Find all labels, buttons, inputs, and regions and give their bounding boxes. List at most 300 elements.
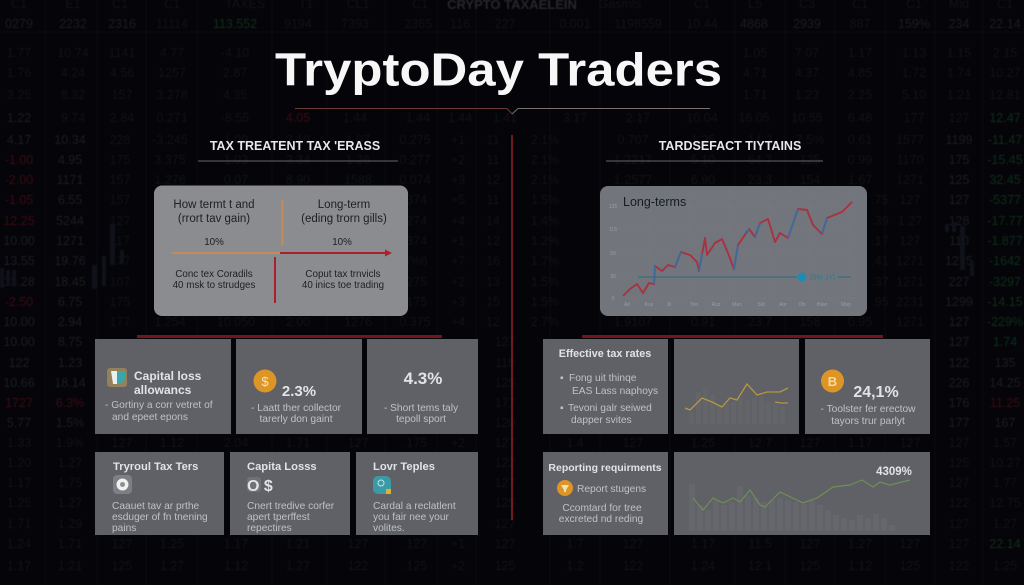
background: market data table: 4.35: [223, 88, 247, 102]
y axis labels: 115: [609, 227, 617, 233]
background: market data table: .39: [871, 214, 889, 228]
x axis labels: Ad: [624, 302, 630, 308]
background: market data table: 19.76: [54, 254, 86, 268]
y axis labels: 30: [610, 274, 616, 280]
background: market data table: -14.15: [987, 295, 1023, 309]
title divider with notch: [295, 108, 710, 114]
card: 2.3% stat: 2.3%: [282, 383, 316, 400]
background: market data table: 127: [112, 436, 132, 450]
background: market data table: 1.27: [898, 214, 922, 228]
background: market data table: +2: [451, 275, 465, 289]
card: green trend chart: 4309%: [876, 466, 912, 478]
background: market data table: 125: [949, 173, 969, 187]
background: market data table: 127: [949, 315, 969, 329]
background: market data table: 1.9%: [56, 436, 84, 450]
background: market data table: 1.77: [993, 476, 1017, 490]
background: market data table: 1.12: [224, 559, 248, 573]
background: market data table: 2.1%: [531, 153, 559, 167]
background: market data table: 12.47: [989, 111, 1021, 125]
background: market data table: +2: [451, 436, 465, 450]
background: market data table: 1.13: [902, 46, 926, 60]
card: 2.3% stat: - Laatt ther collector: [251, 403, 342, 414]
background: market data table: 175: [110, 295, 130, 309]
background: market data table: 127: [900, 537, 920, 551]
card: effective tax rates: ▪: [560, 373, 564, 384]
x axis labels: Yvn: [690, 302, 698, 308]
card: effective tax rates: EAS Lass naphoys: [572, 386, 658, 397]
background: market data table: -8.55: [221, 111, 249, 125]
background: market data table: 176: [949, 396, 969, 410]
long-term note: [302, 269, 384, 291]
background: market data table: 0.275: [399, 133, 431, 147]
background: market data table: +1: [451, 537, 465, 551]
background: market data table: 15: [486, 295, 500, 309]
background: market data table: 110: [949, 234, 969, 248]
background: market data table: 12: [486, 173, 500, 187]
long-term heading: [301, 199, 387, 225]
background: market data table: 1.4: [566, 436, 584, 450]
background: market data table: 14.2: [748, 133, 772, 147]
background: market data table: 127: [110, 214, 130, 228]
background: market data table: 7.07: [795, 46, 819, 60]
card: tax tiers: Caauet tav ar prthe: [112, 501, 200, 512]
background: market data table: 6.48: [848, 111, 872, 125]
background: market data table: 12.1: [748, 559, 772, 573]
x axis labels: [624, 302, 851, 308]
background: market data table: 3.10: [286, 133, 310, 147]
background: market data table: 1.25: [7, 496, 31, 510]
background: market data table: 9194: [284, 17, 312, 31]
background: market data table: 177: [110, 254, 130, 268]
background: market data table: -2.00: [5, 173, 33, 187]
background: market data table: 1.05: [743, 46, 767, 60]
background: market data table: 1.7: [566, 537, 584, 551]
background: market data table: 227: [949, 275, 969, 289]
card: low tiers: Lovr Teples: [373, 461, 435, 473]
background: market data table: 1.03: [224, 153, 248, 167]
background: market data table: 127: [348, 436, 368, 450]
background: market data table: 122: [949, 356, 969, 370]
card: effective tax rates: [543, 339, 668, 434]
background: market data table: -11.47: [988, 133, 1022, 147]
background: market data table: 1.44: [448, 111, 472, 125]
y axis labels: 0: [612, 296, 615, 302]
background: market data table: 1.27: [848, 537, 872, 551]
background: market data table: 2939: [793, 17, 821, 31]
background: market data table: 11: [487, 153, 500, 167]
chart heading: Long-terms: [623, 195, 686, 209]
card: capital loss: [230, 452, 350, 535]
background: market data table: -17.77: [987, 214, 1023, 228]
background: market data table: 10.27: [989, 456, 1021, 470]
background: market data table: 7393: [341, 17, 369, 31]
lower red divider: [274, 257, 276, 303]
background: market data table: 1.9107: [614, 315, 652, 329]
background: market data table: 1588: [344, 173, 372, 187]
background: market data table: 128: [949, 214, 969, 228]
background: market data table: 1.77: [7, 46, 31, 60]
background: market data table: 10.44: [686, 17, 718, 31]
background: market data table: 127: [900, 234, 920, 248]
background: market data table: 1.24: [691, 559, 715, 573]
background: market data table: 12.75: [989, 496, 1021, 510]
background: market data table: 7.5%: [796, 133, 824, 147]
background: market data table: 2365: [404, 17, 432, 31]
background: market data table: 1.17: [224, 537, 248, 551]
background: market data table: 0.277: [399, 153, 431, 167]
background: market data table: 1.27: [58, 496, 82, 510]
background: market data table: 1.2%: [531, 234, 559, 248]
background: market data table: 3%6: [402, 254, 428, 268]
background: market data table: 125: [495, 559, 515, 573]
background: market data table: 127: [949, 335, 969, 349]
short-term heading: How termt t and: [173, 199, 255, 211]
background: market data table: 10.00: [3, 335, 35, 349]
background: market data table: 125: [800, 153, 820, 167]
background: market data table: 1299: [945, 295, 973, 309]
background: market data table: +4: [451, 214, 465, 228]
background: market data table: 1.276: [154, 173, 186, 187]
background: market data table: 227: [495, 17, 515, 31]
center vertical divider: [511, 135, 513, 520]
background: market data table: 23.7: [748, 315, 772, 329]
background: market data table: 2231: [896, 295, 924, 309]
background: market data table: 1.26: [346, 153, 370, 167]
background: market data table: 1.20: [7, 456, 31, 470]
card: capital loss: apert tperffest: [247, 512, 310, 523]
background: market data table: 1.44: [406, 111, 430, 125]
background: market data table: 0.61: [848, 133, 872, 147]
background: market data table: 125: [949, 456, 969, 470]
background: market data table: 1.22: [7, 111, 31, 125]
background: market data table: 1.5%: [531, 275, 559, 289]
icon: dollar coin: $: [261, 374, 269, 389]
card: effective tax rates: ▪: [560, 403, 564, 414]
background: market data table: 6.90: [691, 173, 715, 187]
background: market data table: 1271: [896, 254, 924, 268]
panel: tax treatment comparison: [154, 186, 408, 316]
background: market data table: 1141: [109, 46, 135, 60]
background: market data table: 1.74: [947, 66, 971, 80]
card: 24,1% stat: - Toolster fer erectow: [821, 404, 916, 415]
background: market data table: +3: [451, 173, 465, 187]
background: market data table: 1.27: [58, 456, 82, 470]
background: market data table: 125: [495, 496, 515, 510]
background: market data table: 127: [949, 111, 969, 125]
background: market data table: 1199: [946, 133, 972, 147]
card: capital loss allowances: allowancs: [134, 383, 192, 397]
background: market data table: -4.10: [221, 46, 249, 60]
card: capital loss allowances: and epeet epons: [112, 412, 188, 423]
background: market data table: 13.28: [3, 275, 35, 289]
card: effective tax rates: Effective tax rates: [559, 348, 651, 360]
card: capital loss allowances: Capital loss: [134, 369, 202, 383]
background: market data table: .274: [403, 214, 427, 228]
background: market data table: 1.254: [154, 315, 186, 329]
background: market data table: 2.15: [993, 46, 1017, 60]
background: market data table: +7: [451, 254, 465, 268]
background: market data table: 119: [495, 356, 515, 370]
background: market data table: 122: [348, 559, 368, 573]
card: reporting requirements: Report stugens: [577, 484, 646, 495]
background: market data table: -5377: [989, 193, 1021, 207]
card: tax tiers: pains: [112, 523, 136, 534]
card: 24,1% stat: 24,1%: [853, 384, 899, 401]
background: market data table: 1.5%: [56, 416, 84, 430]
card: effective tax rates: Tevoni galr seiwed: [568, 403, 652, 414]
background: market data table: 11.5: [748, 537, 772, 551]
background: market data table: 127: [900, 436, 920, 450]
short-term heading: (rrort tav gain): [178, 213, 250, 225]
background: market data table: 3.375: [154, 153, 186, 167]
background: market data table: 159%: [898, 17, 930, 31]
long-term note: Coput tax trnvicls: [305, 269, 381, 280]
short-term rate: 10%: [204, 237, 224, 248]
card: orange line chart: [674, 339, 799, 434]
background: market data table: 4.37: [795, 66, 819, 80]
background: market data table: 8.75: [58, 335, 82, 349]
background: market data table: 1.21: [286, 537, 310, 551]
background: market data table: 1.12: [848, 559, 872, 573]
background: market data table: 1271: [896, 315, 924, 329]
background: market data table: -15.45: [987, 153, 1023, 167]
card: 4.3% stat: tepoll sport: [396, 414, 446, 425]
background: market data table: 127: [949, 476, 969, 490]
background: market data table: 122: [949, 496, 969, 510]
background: market data table: 127: [495, 537, 515, 551]
background: market data table: 1171: [57, 173, 83, 187]
background: market data table: 1727: [5, 396, 33, 410]
long-term note: 40 inics toe trading: [302, 280, 384, 291]
heading: right column: TARDSEFACT TIYTAINS: [659, 139, 801, 153]
reference line and label: [638, 272, 851, 282]
card: 24,1% stat: tayors trur parlyt: [831, 416, 905, 427]
background: market data table: 6.75: [58, 295, 82, 309]
background: market data table: 1.75: [58, 476, 82, 490]
background: market data table: 4868: [740, 17, 768, 31]
background: market data table: 2.25: [848, 88, 872, 102]
background: market data table: 1.00: [224, 133, 248, 147]
card: low tiers: volites.: [373, 523, 405, 534]
background: market data table: 1.07: [346, 133, 370, 147]
background: market data table: 18.45: [54, 275, 86, 289]
background: market data table: 1271: [896, 275, 924, 289]
background: market data table: 4.77: [160, 46, 184, 60]
card: 2.3% stat: [236, 339, 362, 434]
background: market data table: 0.271: [156, 111, 188, 125]
x axis labels: Ob: [799, 302, 806, 308]
background: market data table: 2316: [108, 17, 136, 31]
background: market data table: 1.33: [7, 436, 31, 450]
background: market data table: 2.00: [286, 315, 310, 329]
card: 4.3% stat: [367, 339, 478, 434]
background: market data table: 1.72: [902, 66, 926, 80]
background: market data table: 1271: [896, 173, 924, 187]
background: market data table: 5.10: [691, 153, 715, 167]
background: market data table: 113.552: [213, 17, 257, 31]
x axis labels: Map: [841, 302, 851, 308]
background: market data table: 8.90: [286, 173, 310, 187]
background: market data table: 1.7%: [531, 254, 559, 268]
card: reporting requirements: Ccomtard for tree: [562, 503, 642, 514]
background: market data table: 10.74: [57, 46, 89, 60]
background: market data table: 127: [949, 436, 969, 450]
background: market data table: 10.66: [3, 376, 35, 390]
background: market data table: 125: [800, 559, 820, 573]
icon: multicolor tile: [107, 368, 127, 387]
background: market data table: 12: [486, 315, 500, 329]
background: market data table: 10.00: [3, 234, 35, 248]
card: reporting requirements: Reporting requirments: [548, 462, 662, 474]
background: market data table: 0.95: [848, 315, 872, 329]
background: market data table: 5244: [56, 214, 84, 228]
background: market data table: 13.55: [3, 254, 35, 268]
background: market data table: 127: [623, 537, 643, 551]
card: effective tax rates: dapper svites: [571, 415, 632, 426]
background: market data table: 4.17: [7, 133, 31, 147]
background: market data table: -1.00: [5, 153, 33, 167]
card: low tiers: [356, 452, 478, 535]
background: market data table: 1.76: [7, 66, 31, 80]
background: market data table: 2.87: [223, 66, 247, 80]
background: market data table: 1.41: [493, 111, 517, 125]
background: market data table: 157: [110, 173, 130, 187]
background: market data table: .127: [403, 537, 427, 551]
long-term rate: 10%: [332, 237, 352, 248]
background: market data table: 11: [487, 133, 500, 147]
card: capital loss: Cnert tredive corfer: [247, 501, 335, 512]
background: market data table: 1.2577: [614, 173, 652, 187]
arrow axis: [172, 250, 392, 256]
background: market data table: 122: [9, 356, 29, 370]
background: market data table: 127: [495, 517, 515, 531]
background: market data table: 125: [112, 559, 132, 573]
background: market data table: 0.99: [848, 153, 872, 167]
background: market data table: 11114: [156, 17, 188, 31]
card: 24,1% stat: [805, 339, 930, 434]
background: market data table: 3.17: [563, 111, 587, 125]
icon: bitcoin coin: B: [828, 374, 837, 389]
background: market data table: 2.1%: [531, 173, 559, 187]
background: market data table: 177: [495, 396, 515, 410]
background: market data table: 1.17: [7, 476, 31, 490]
background: market data table: -3.245: [152, 133, 188, 147]
background: market data table: 127: [495, 436, 515, 450]
short-term note: Conc tex Coradils: [175, 269, 253, 280]
background: market data table: 1.67: [848, 173, 872, 187]
background: market data table: 32.45: [989, 173, 1021, 187]
background: market data table: 226: [949, 376, 969, 390]
short-term note: 40 msk to strudges: [173, 280, 255, 291]
short-term heading: [173, 199, 255, 225]
background: market data table: 1.12: [160, 436, 184, 450]
background: market data table: 14.25: [989, 376, 1021, 390]
background: market data table: -1.877: [987, 234, 1023, 248]
card: tax tiers: Tryroul Tax Ters: [113, 461, 198, 473]
background: market data table: 167: [995, 416, 1015, 430]
background: market data table: 5.77: [7, 416, 31, 430]
background: market data table: 1.5%: [531, 295, 559, 309]
background: market data table: 1.25: [691, 133, 715, 147]
background: market data table: 1271: [56, 234, 84, 248]
background: market data table: 2.17: [626, 111, 650, 125]
x axis labels: Kuy: [645, 302, 654, 308]
background: market data table: 8.32: [61, 88, 85, 102]
background: market data table: 1.44: [343, 111, 367, 125]
background: market data table: 10.00: [3, 315, 35, 329]
background: market data table: -3297: [989, 275, 1021, 289]
background: market data table: .175: [403, 436, 427, 450]
background: market data table: 234: [949, 17, 969, 31]
card: tax tiers: esduger of fn tnening: [112, 512, 208, 523]
icon: report badge: [557, 480, 573, 496]
background: market data table: 1275: [945, 254, 973, 268]
background: market data table: 177: [904, 111, 924, 125]
card: low tiers: Cardal a reclatlent: [373, 501, 456, 512]
background: market data table: 1.17: [7, 559, 31, 573]
background: market data table: 127: [949, 517, 969, 531]
background: market data table: -2.50: [5, 295, 33, 309]
background: market data table: 1.25: [691, 436, 715, 450]
background: market data table: 0.001: [559, 17, 591, 31]
background: market data table: 14: [486, 214, 500, 228]
background: market data table: 6.3%: [56, 396, 84, 410]
background: market data table: 1276: [344, 315, 372, 329]
background: market data table: 135: [995, 356, 1015, 370]
x axis labels: Ruz: [712, 302, 721, 308]
background: market data table: 10.34: [54, 133, 86, 147]
background: market data table: 4.56: [110, 66, 134, 80]
background: market data table: 3.34: [286, 153, 310, 167]
background: market data table: 9.74: [61, 111, 85, 125]
background: market data table: 1.71: [58, 537, 82, 551]
background: market data table: .75: [871, 193, 889, 207]
price line: [623, 202, 852, 296]
background: market data table: 4.24: [61, 66, 85, 80]
icon: white coin: [113, 475, 132, 494]
background: market data table: 11: [487, 193, 500, 207]
background: market data table: 11.25: [990, 396, 1020, 410]
background: market data table: .95: [871, 295, 889, 309]
background: market data table: 0.375: [399, 315, 431, 329]
background: market data table: 125: [900, 559, 920, 573]
background: market data table: 10.050: [217, 315, 255, 329]
background: market data table: 175: [110, 153, 130, 167]
background: market data table: 12.7: [748, 436, 772, 450]
background: market data table: -1642: [989, 254, 1021, 268]
background: market data table: 177: [110, 315, 130, 329]
background: market data table: 116: [450, 17, 470, 31]
background: market data table: 1.71: [7, 517, 31, 531]
card: capital loss allowances: [95, 339, 231, 434]
background: market data table: 1.5%: [531, 193, 559, 207]
short-term note: [173, 269, 255, 291]
background: market data table: 0.074: [399, 173, 431, 187]
background: market data table: 0.707: [617, 133, 649, 147]
background: market data table: +5: [451, 193, 465, 207]
background: market data table: 117: [110, 234, 130, 248]
upper orange divider: [282, 200, 284, 245]
background: market data table: .41: [871, 254, 889, 268]
icon: zero dollar: O $: [247, 478, 273, 495]
background: market data table: 0.91: [691, 315, 715, 329]
background: market data table: .275: [403, 275, 427, 289]
background: market data table: 18.14: [54, 376, 86, 390]
background: market data table: +3: [451, 295, 465, 309]
background: market data table: 10.04: [686, 111, 718, 125]
x axis labels: Ihlan: [817, 302, 828, 308]
background: market data table: 158: [800, 315, 820, 329]
